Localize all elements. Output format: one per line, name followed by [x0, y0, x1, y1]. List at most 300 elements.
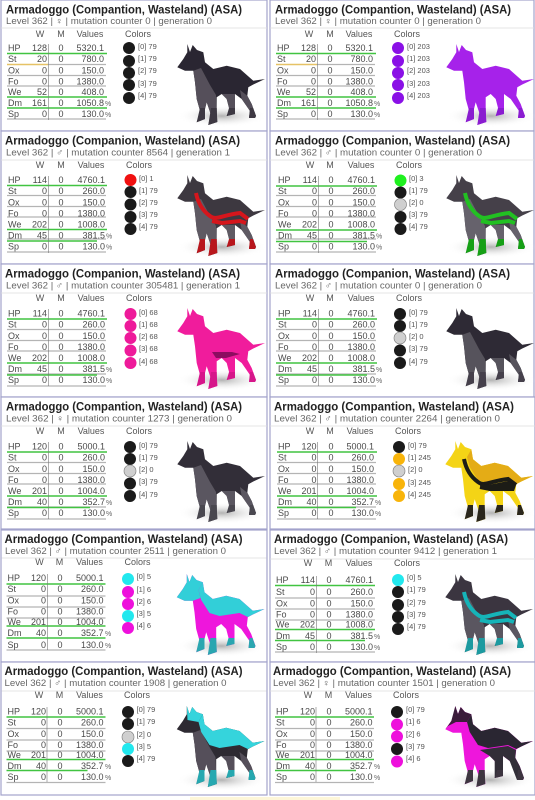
color swatches: [1] 203: [407, 54, 430, 63]
stats table: We: [277, 87, 290, 97]
color swatches: [3] 5: [136, 609, 151, 618]
stats table: HP: [8, 43, 21, 53]
stats table: %: [106, 511, 112, 518]
color swatches: [3] 79: [139, 477, 158, 486]
stats table: Sp: [277, 109, 288, 119]
color swatches: [0] 3: [409, 174, 424, 183]
stats table: HP: [276, 706, 289, 716]
stats table: Values: [76, 557, 103, 567]
stats table: HP: [277, 43, 290, 53]
dog image: [446, 44, 535, 127]
stats table: W: [304, 558, 313, 568]
stats table: 150.0: [352, 198, 375, 208]
stats table: HP: [278, 308, 291, 318]
stats table: 52: [37, 87, 47, 97]
stats table: 0: [57, 573, 63, 583]
title: Armadoggo (Companion, Wasteland) (ASA): [275, 266, 510, 280]
stats table: 352.7: [350, 761, 372, 771]
stats table: 0: [58, 331, 64, 341]
stats table: We: [8, 353, 21, 363]
color swatches: [1] 6: [406, 717, 421, 726]
color swatches: [391, 690, 425, 768]
stats table: 120: [31, 706, 46, 716]
stats table: 0: [327, 66, 333, 76]
stats table: 0: [328, 220, 334, 230]
stats table: Ox: [276, 598, 288, 608]
stats table: Ox: [277, 66, 289, 76]
color swatches: [4] 79: [136, 754, 155, 763]
stats table: 150.0: [81, 729, 104, 739]
stats table: W: [36, 426, 45, 436]
stats table: 1380.0: [345, 610, 373, 620]
stats table: 352.7: [81, 761, 104, 771]
subtitle: Level 362 | ♂ | mutation counter 2511 | generation 0: [5, 546, 226, 556]
stats table: 5320.1: [345, 43, 373, 53]
stats table: Ox: [8, 729, 20, 739]
color swatches: [3] 79: [406, 742, 425, 751]
stats table: Dm: [278, 364, 292, 374]
stats table: 381.5: [352, 230, 375, 240]
color swatches: [0] 79: [139, 441, 158, 450]
stats table: Fo: [8, 76, 19, 86]
subtitle: Level 362 | ♂ | mutation counter 0 | generation 0: [275, 148, 482, 158]
stats table: 130.0: [82, 242, 105, 252]
card: row 3 right, dark: [270, 264, 535, 397]
stats table: HP: [276, 575, 289, 585]
stats table: 0: [312, 320, 317, 330]
stats table: 0: [328, 186, 334, 196]
stats table: 0: [328, 175, 334, 185]
stats table: 150.0: [82, 464, 105, 474]
stats table: 0: [57, 729, 63, 739]
color swatches: [0] 68: [139, 308, 158, 317]
stats table: 0: [326, 631, 332, 641]
bottom strip: [190, 797, 340, 800]
card: row 1 left, all black: [1, 0, 267, 131]
stats table: We: [278, 486, 291, 496]
color swatches: Colors: [124, 557, 151, 567]
stats table: %: [374, 101, 380, 108]
stats table: 0: [58, 54, 64, 64]
color swatches: [1] 6: [136, 585, 151, 594]
stats table: 130.0: [82, 508, 105, 518]
stats table: 0: [310, 587, 315, 597]
stats table: 120: [31, 573, 46, 583]
subtitle: Level 362 | ♂ | mutation counter 9412 | generation 1: [274, 546, 497, 556]
stats table: 0: [41, 596, 46, 606]
color swatches: [2] 68: [139, 332, 158, 341]
stats table: 161: [301, 98, 316, 108]
stats table: 1380.0: [347, 208, 375, 218]
stats table: St: [8, 320, 17, 330]
subtitle: Level 362 | ♀ | mutation counter 1501 | generation 0: [273, 678, 495, 688]
stats table: 260.0: [82, 186, 105, 196]
stats table: W: [306, 293, 315, 303]
stats table: 0: [57, 628, 63, 638]
card: row 6 right, magenta: [270, 662, 535, 795]
stats table: Values: [348, 293, 375, 303]
color swatches: [1] 79: [136, 717, 155, 726]
stats table: W: [306, 160, 315, 170]
stats table: We: [276, 620, 289, 630]
stats table: 1004.0: [76, 750, 104, 760]
color swatches: Colors: [126, 160, 153, 170]
stats table: 0: [326, 729, 332, 739]
stats table: 0: [57, 640, 63, 650]
stats table: 0: [57, 772, 63, 782]
stats table: 120: [301, 442, 316, 452]
stats table: %: [376, 378, 382, 385]
color swatches: [3] 203: [407, 79, 430, 88]
stats table: %: [105, 643, 111, 650]
stats table: 0: [58, 497, 64, 507]
stats table: We: [8, 220, 21, 230]
stats table: 0: [57, 584, 63, 594]
stats table: [270, 160, 534, 253]
stats table: St: [8, 186, 17, 196]
stats table: Ox: [278, 198, 290, 208]
stats table: M: [326, 29, 334, 39]
stats table: 0: [328, 452, 334, 462]
color swatches: [0] 79: [136, 705, 155, 714]
stats table: 5000.1: [76, 573, 104, 583]
stats table: 114: [33, 308, 47, 318]
stats table: 114: [33, 175, 47, 185]
stats table: %: [374, 775, 380, 782]
color swatches: [4] 203: [407, 91, 430, 100]
stats table: 0: [58, 320, 64, 330]
color swatches: [392, 558, 426, 635]
stats table: 130.0: [350, 109, 373, 119]
stats table: 0: [42, 452, 47, 462]
stats table: Values: [345, 690, 372, 700]
title: Armadoggo (Companion, Wasteland) (ASA): [5, 266, 240, 280]
title: Armadoggo (Companion, Wasteland) (ASA): [5, 134, 240, 148]
stats table: 202: [32, 220, 47, 230]
color swatches: [3] 5: [136, 742, 151, 751]
dog image: [177, 44, 267, 127]
color swatches: Colors: [396, 293, 423, 303]
stats table: 1050.8: [76, 98, 104, 108]
stats table: 260.0: [350, 718, 372, 728]
color swatches: [0] 5: [407, 573, 422, 582]
stats table: 114: [301, 575, 315, 585]
stats table: Sp: [8, 375, 19, 385]
color swatches: [4] 245: [408, 490, 431, 499]
card: row 2 right, green: [270, 131, 535, 264]
stats table: St: [8, 452, 17, 462]
stats table: 150.0: [81, 596, 104, 606]
stats table: 45: [305, 631, 315, 641]
stats table: Values: [77, 29, 104, 39]
stats table: 0: [312, 331, 317, 341]
stats table: 114: [303, 175, 317, 185]
title: Armadoggo (Compantion, Wasteland) (ASA): [4, 664, 242, 678]
stats table: 0: [327, 43, 333, 53]
stats table: 130.0: [352, 242, 375, 252]
stats table: 381.5: [350, 631, 373, 641]
stats table: Fo: [276, 740, 287, 750]
stats table: 0: [41, 729, 46, 739]
stats table: 0: [310, 610, 315, 620]
stats table: 0: [328, 320, 334, 330]
stats table: Fo: [278, 208, 289, 218]
stats table: %: [376, 244, 382, 252]
stats table: 0: [57, 740, 63, 750]
stats table: 0: [312, 242, 317, 252]
stats table: Ox: [8, 331, 20, 341]
stats table: %: [105, 764, 111, 771]
stats table: Ox: [8, 464, 20, 474]
subtitle: Level 362 | ♀ | mutation counter 0 | generation 0: [6, 16, 212, 26]
stats table: Dm: [8, 497, 22, 507]
color swatches: [4] 79: [139, 490, 158, 499]
stats table: [1, 426, 267, 519]
color swatches: [4] 68: [139, 357, 158, 366]
stats table: M: [57, 426, 65, 436]
stats table: 20: [306, 54, 316, 64]
stats table: 150.0: [81, 66, 104, 76]
stats table: St: [278, 452, 287, 462]
stats table: 0: [328, 198, 334, 208]
stats table: %: [374, 764, 380, 771]
stats table: 0: [58, 364, 64, 374]
stats table: 1380.0: [345, 740, 372, 750]
color swatches: [3] 79: [407, 610, 426, 619]
stats table: 0: [41, 740, 46, 750]
stats table: 0: [311, 109, 316, 119]
stats table: 0: [58, 464, 64, 474]
stats table: 1008.0: [347, 220, 375, 230]
stats table: 0: [41, 584, 46, 594]
color swatches: [2] 6: [406, 730, 421, 738]
stats table: 0: [42, 320, 47, 330]
color swatches: Colors: [124, 690, 151, 700]
stats table: We: [278, 220, 291, 230]
stats table: 201: [300, 750, 315, 760]
card: row 2 left, red: [1, 131, 267, 264]
stats table: 780.0: [81, 54, 104, 64]
stats table: %: [106, 367, 112, 374]
stats table: HP: [278, 442, 291, 452]
stats table: Sp: [278, 242, 289, 252]
stats table: 0: [310, 740, 315, 750]
stats table: 0: [328, 475, 334, 485]
color swatches: [123, 29, 157, 104]
stats table: 1380.0: [77, 475, 105, 485]
stats table: 0: [41, 772, 46, 782]
stats table: 120: [32, 442, 47, 452]
color swatches: [3] 68: [139, 344, 158, 353]
stats table: 0: [327, 98, 333, 108]
stats table: 0: [326, 772, 332, 782]
stats table: Dm: [8, 230, 22, 240]
stats table: Sp: [278, 508, 289, 518]
stats table: 1380.0: [76, 76, 104, 86]
stats table: 150.0: [350, 729, 372, 739]
stats table: 150.0: [350, 598, 373, 608]
card: row 6 left, cyan back: [1, 662, 267, 795]
color swatches: Colors: [395, 426, 422, 436]
stats table: Values: [348, 160, 375, 170]
stats table: 0: [327, 109, 333, 119]
stats table: Fo: [8, 475, 19, 485]
stats table: 150.0: [350, 66, 373, 76]
color swatches: [1] 79: [409, 186, 428, 195]
stats table: 1380.0: [76, 606, 104, 616]
stats table: 0: [42, 198, 47, 208]
stats table: M: [325, 690, 332, 700]
stats table: 0: [310, 729, 315, 739]
stats table: HP: [8, 573, 20, 583]
color swatches: [4] 79: [409, 222, 428, 231]
stats table: 0: [328, 308, 334, 318]
stats table: 0: [58, 186, 64, 196]
stats table: 0: [58, 98, 64, 108]
color swatches: Colors: [125, 29, 152, 39]
stats table: HP: [278, 175, 291, 185]
color swatches: [1] 79: [138, 54, 157, 63]
color swatches: [394, 293, 428, 369]
stats table: Fo: [8, 208, 19, 218]
stats table: 0: [328, 508, 334, 518]
stats table: 0: [327, 76, 333, 86]
stats table: 0: [312, 186, 317, 196]
stats table: 40: [305, 761, 315, 771]
stats table: 40: [36, 761, 46, 771]
stats table: 0: [326, 598, 332, 608]
stats table: Values: [346, 558, 373, 568]
dog image: [176, 574, 266, 657]
card: row 1 right, purple: [270, 0, 535, 131]
stats table: 1380.0: [345, 76, 373, 86]
stats table: W: [36, 160, 45, 170]
dog image: [446, 175, 535, 258]
title: Armadoggo (Companion, Wasteland) (ASA): [275, 134, 510, 148]
stats table: We: [276, 750, 289, 760]
stats table: 260.0: [350, 587, 373, 597]
stats table: 0: [326, 718, 332, 728]
stats table: 0: [42, 375, 47, 385]
stats table: 150.0: [82, 331, 105, 341]
stats table: 0: [58, 76, 64, 86]
stats table: M: [57, 29, 65, 39]
stats table: 202: [302, 353, 317, 363]
stats table: 260.0: [81, 584, 104, 594]
stats table: 0: [328, 242, 334, 252]
stats table: 4760.1: [347, 308, 375, 318]
stats table: W: [306, 426, 315, 436]
stats table: 0: [58, 452, 64, 462]
stats table: [270, 558, 535, 653]
stats table: 0: [311, 452, 316, 462]
stats table: Values: [78, 426, 105, 436]
stats table: 4760.1: [347, 175, 375, 185]
stats table: %: [105, 775, 111, 782]
stats table: 381.5: [82, 230, 105, 240]
subtitle: Level 362 | ♀ | mutation counter 0 | generation 0: [275, 16, 481, 26]
stats table: 202: [32, 353, 47, 363]
card: row 4 left, dark: [1, 397, 267, 529]
stats table: 0: [58, 87, 64, 97]
stats table: %: [374, 634, 380, 641]
stats table: 0: [57, 596, 63, 606]
stats table: 45: [307, 364, 317, 374]
stats table: Fo: [277, 76, 288, 86]
stats table: 0: [311, 508, 316, 518]
stats table: 0: [58, 109, 64, 119]
stats table: 0: [57, 750, 63, 760]
stats table: W: [36, 29, 45, 39]
stats table: 352.7: [82, 497, 105, 507]
stats table: 0: [58, 220, 64, 230]
stats table: 0: [328, 331, 334, 341]
stats table: 130.0: [81, 640, 104, 650]
color swatches: [4] 79: [409, 357, 428, 366]
stats table: 1008.0: [77, 353, 105, 363]
stats table: 5000.1: [77, 442, 105, 452]
title: Armadoggo (Companion, Wasteland) (ASA): [274, 532, 508, 546]
color swatches: [4] 6: [136, 621, 151, 630]
color swatches: [2] 0: [409, 332, 424, 341]
stats table: 0: [310, 642, 315, 652]
stats table: 1008.0: [77, 220, 105, 230]
color swatches: Colors: [394, 558, 421, 568]
dog image: [177, 441, 267, 524]
stats table: 150.0: [82, 198, 105, 208]
stats table: %: [105, 631, 111, 638]
stats table: 114: [303, 308, 317, 318]
stats table: St: [277, 54, 286, 64]
stats table: 0: [41, 718, 46, 728]
stats table: 0: [328, 364, 334, 374]
stats table: 0: [42, 342, 47, 352]
stats table: 1380.0: [347, 342, 375, 352]
stats table: 0: [42, 66, 47, 76]
stats table: 1008.0: [347, 353, 375, 363]
stats table: 0: [311, 464, 316, 474]
stats table: 0: [58, 342, 64, 352]
stats table: Dm: [8, 98, 22, 108]
stats table: 4760.1: [77, 175, 105, 185]
title: Armadoggo (Compantion, Wasteland) (ASA): [273, 664, 511, 678]
dog image: [176, 706, 266, 791]
stats table: 0: [328, 442, 334, 452]
stats table: 0: [58, 475, 64, 485]
stats table: M: [57, 160, 65, 170]
stats table: HP: [8, 175, 21, 185]
color swatches: [124, 293, 158, 369]
color swatches: [0] 203: [407, 42, 430, 51]
stats table: 0: [58, 375, 64, 385]
title: Armadoggo (Compantion, Wasteland) (ASA): [6, 400, 242, 414]
stats table: Ox: [8, 596, 20, 606]
stats table: Sp: [276, 772, 287, 782]
stats table: 1380.0: [346, 475, 374, 485]
title: Armadoggo (Compantion, Wasteland) (ASA): [274, 400, 514, 414]
stats table: 260.0: [82, 320, 105, 330]
stats table: 150.0: [351, 464, 374, 474]
stats table: Sp: [8, 109, 19, 119]
stats table: Sp: [8, 508, 19, 518]
stats table: 0: [326, 575, 332, 585]
subtitle: Level 362 | ♀ | mutation counter 1273 | generation 0: [6, 414, 232, 424]
stats table: 0: [326, 620, 332, 630]
color swatches: [4] 79: [139, 222, 158, 231]
stats table: 128: [301, 43, 316, 53]
stats table: 381.5: [82, 364, 105, 374]
stats table: 0: [312, 208, 317, 218]
